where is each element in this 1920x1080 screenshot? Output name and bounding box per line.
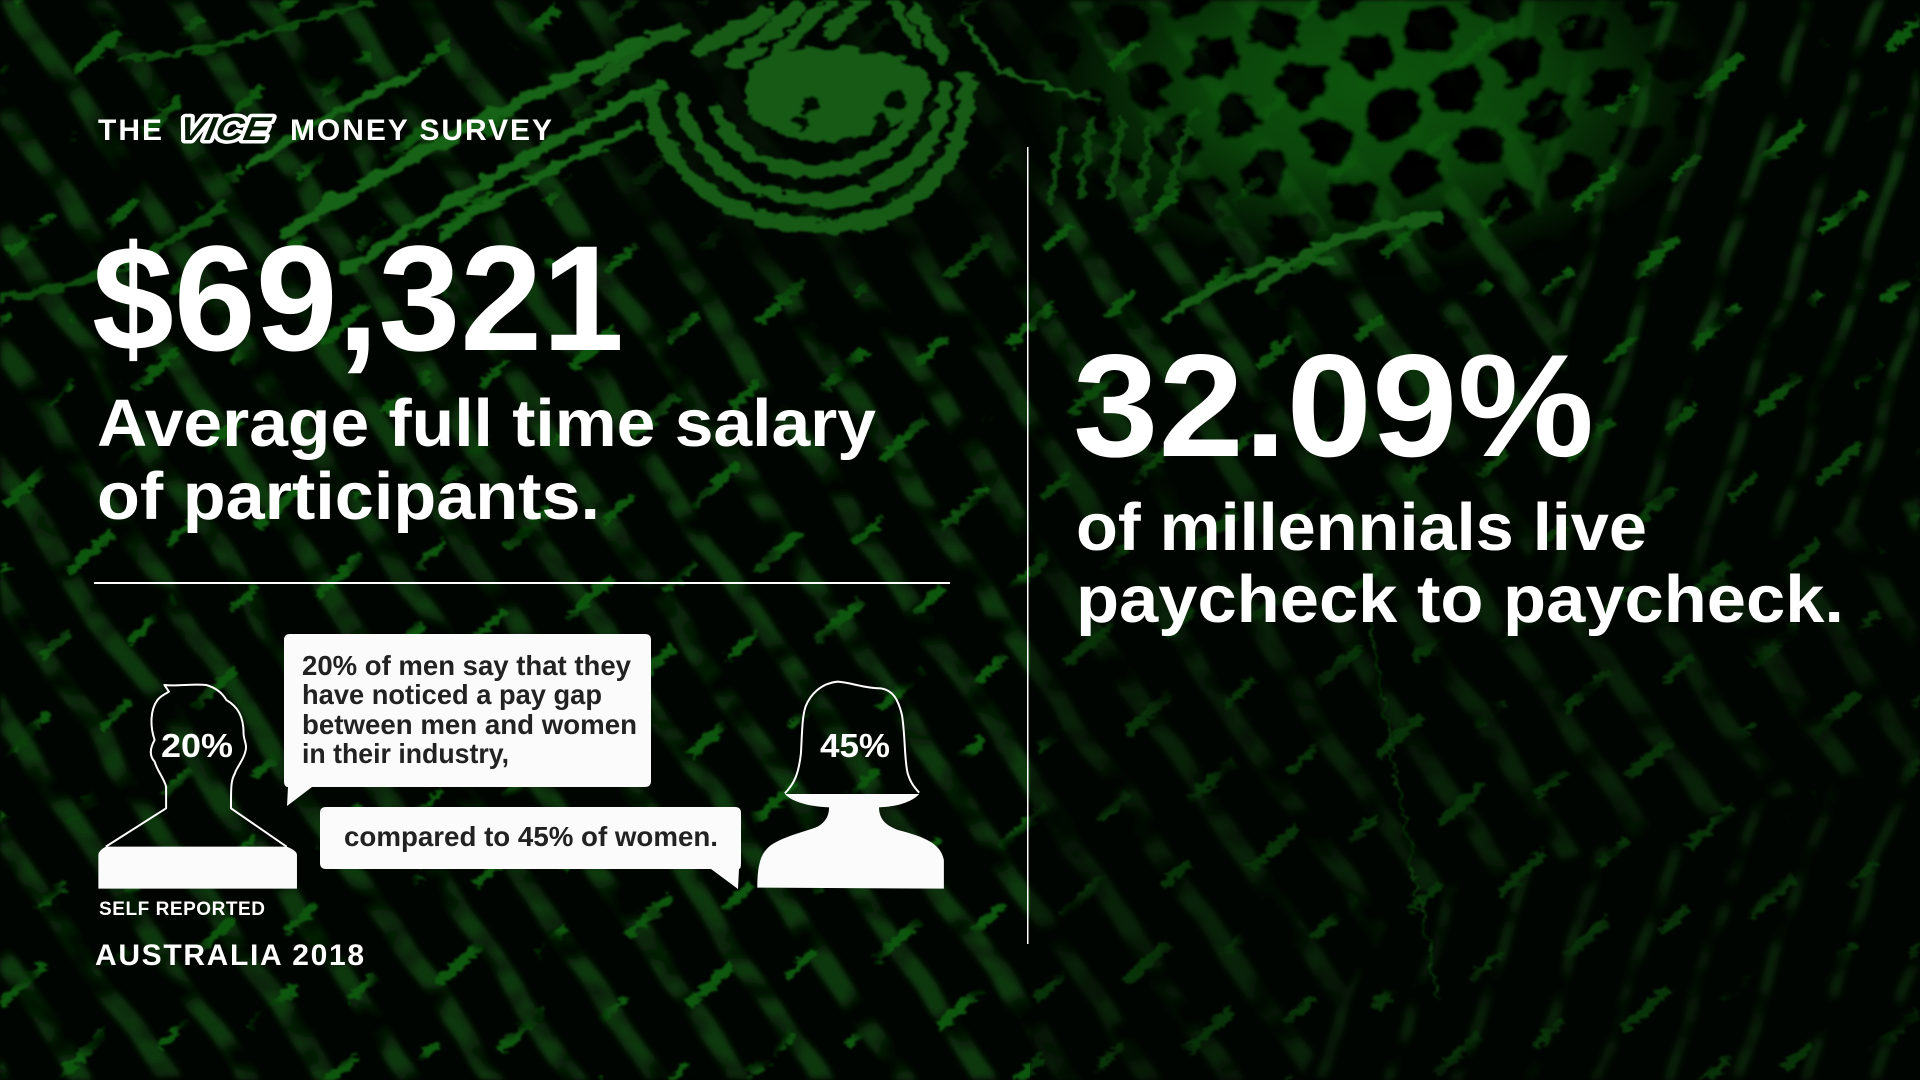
dimming of lower right	[1030, 300, 1920, 1080]
icon: VICE logo: VICE	[176, 111, 274, 148]
center vertical divider	[1027, 147, 1028, 944]
dark area beneath the whorl	[540, 0, 1120, 310]
divider	[94, 582, 950, 584]
speech bubble: women: compared to 45% of women.	[344, 821, 718, 852]
salary caption	[97, 386, 876, 534]
heading: the VICE money survey: THE	[98, 114, 162, 147]
millennials caption: of millennials live	[1076, 490, 1647, 565]
icon: man silhouette with 20%	[98, 685, 297, 889]
icon: VICE logo: VICE	[176, 111, 274, 148]
icon: woman silhouette with 45%	[757, 682, 944, 889]
big stat: average salary: $69,321	[92, 214, 624, 382]
curved ridges below mesh	[1050, 120, 1440, 1000]
top-right mesh	[1047, 0, 1693, 260]
millennials caption: paycheck to paycheck.	[1076, 562, 1844, 637]
speech bubble: men: have noticed a pay gap	[302, 679, 602, 710]
icon: woman silhouette with 45%: 45%	[820, 727, 890, 764]
speech bubble: men: in their industry,	[302, 738, 509, 769]
heading: the VICE money survey	[98, 111, 552, 148]
speech bubble: men	[284, 634, 651, 806]
speech bubble: women	[320, 807, 741, 889]
label: Australia 2018: AUSTRALIA 2018	[95, 939, 364, 972]
salary caption: Average full time salary	[97, 386, 876, 461]
heading: the VICE money survey: MONEY SURVEY	[290, 114, 552, 147]
big stat: millennials: 32.09%	[1073, 324, 1594, 487]
icon: man silhouette with 20%: 20%	[161, 727, 233, 764]
salary caption: of participants.	[97, 459, 600, 534]
millennials caption	[1076, 490, 1844, 637]
top-left bright ridges	[0, 0, 660, 300]
speech bubble: men: between men and women	[302, 709, 637, 740]
fingerprint whorl	[600, 0, 1100, 227]
footnote: self reported: SELF REPORTED	[99, 899, 265, 920]
speech bubble: men: 20% of men say that they	[302, 650, 631, 681]
